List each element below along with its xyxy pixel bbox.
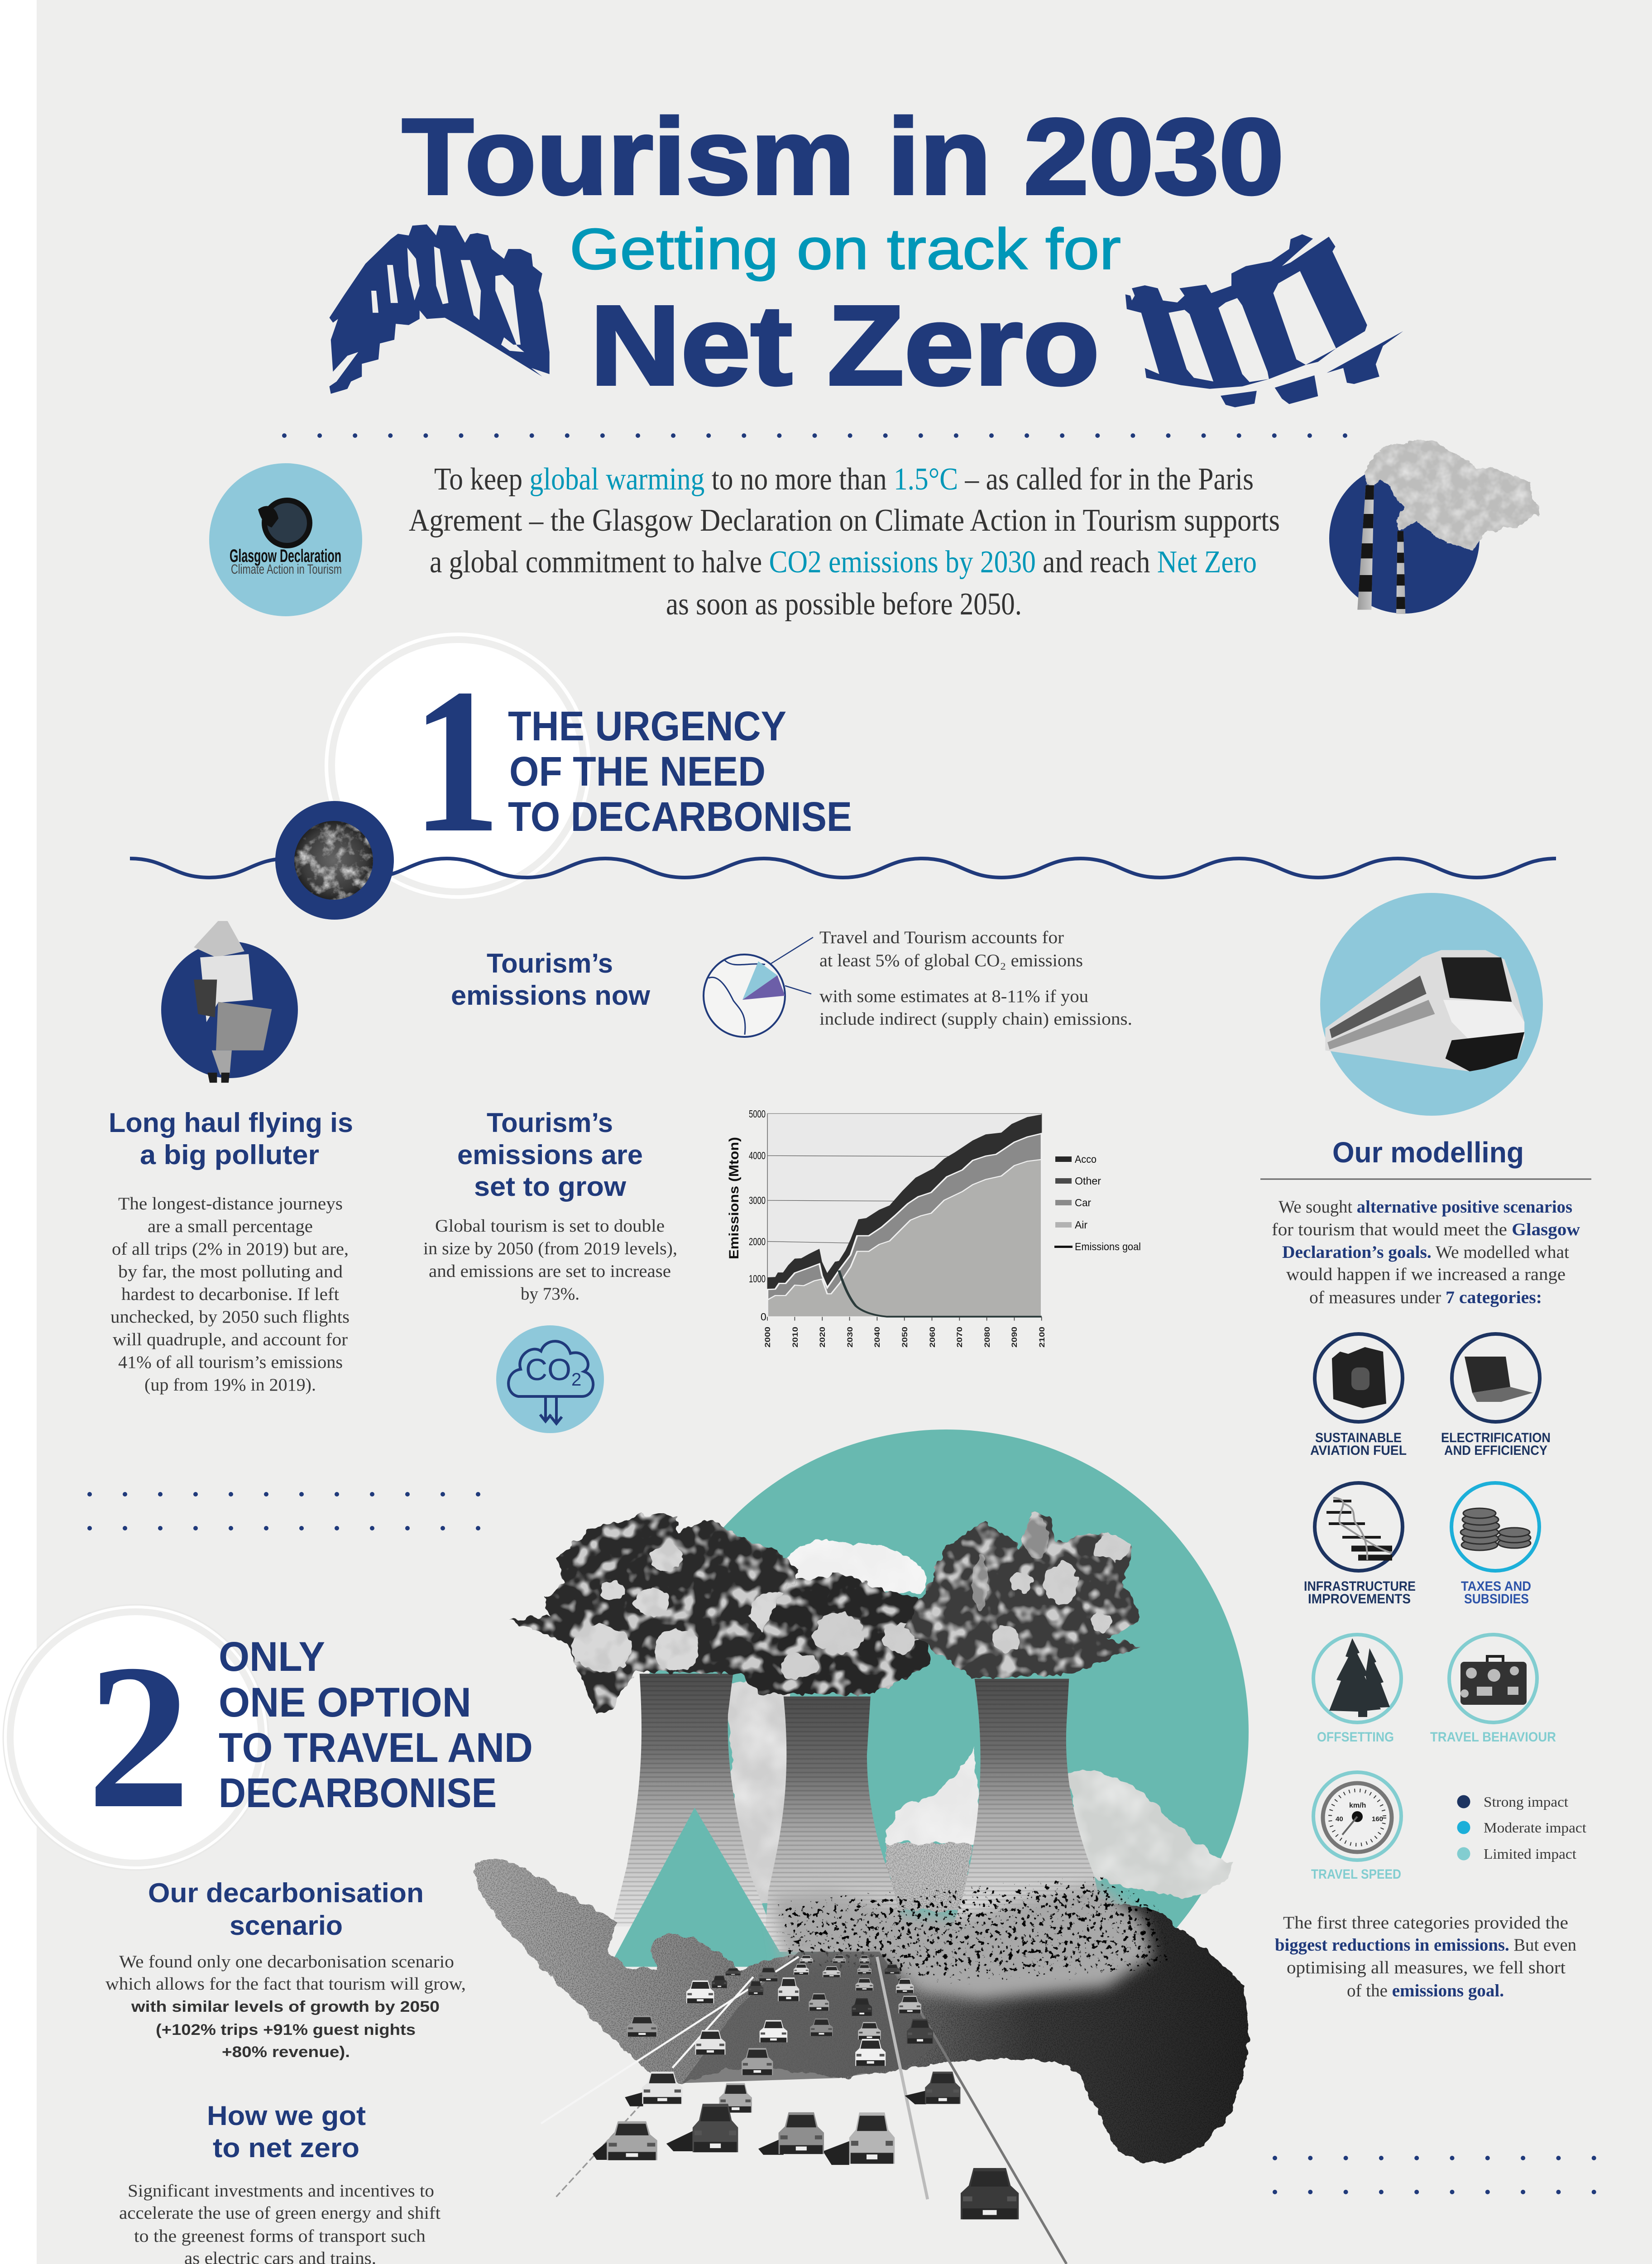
title: [402, 97, 1284, 408]
text: growth body: in size by 2050 (from 2019 levels),: [423, 1239, 677, 1258]
text: long haul body: unchecked, by 2050 such flights: [110, 1307, 350, 1327]
text: emissions share: Travel and Tourism accounts for: [819, 928, 1064, 947]
heading: our modelling: Our modelling: [1332, 1136, 1524, 1169]
icon: railway track left: [330, 225, 550, 394]
hand: [475, 1859, 1249, 2163]
intro text: as soon as possible before 2050.: [666, 587, 1022, 622]
text: long haul body: are a small percentage: [148, 1217, 313, 1236]
text: long haul body: (up from 19% in 2019).: [144, 1375, 316, 1395]
text: modelling conclusion: optimising all measures, we fell short: [1287, 1958, 1566, 1977]
text: decarbonisation body: with similar levels of growth by 2050: [131, 1998, 440, 2015]
heading: set to grow: emissions are: [457, 1140, 643, 1170]
chart y labels: 4000: [749, 1150, 766, 1161]
heading: set to grow: [457, 1108, 643, 1202]
chart y labels: 3000: [749, 1194, 766, 1206]
category: travel speed: 40: [1336, 1815, 1343, 1823]
text: net zero body: to the greenest forms of transport such: [134, 2226, 426, 2246]
heading: how we got to net zero: How we got: [207, 2101, 366, 2131]
legend: impact levels: Moderate impact: [1484, 1819, 1586, 1836]
legend: impact levels: Strong impact: [1484, 1794, 1568, 1810]
text: modelling intro: would happen if we increased a range: [1286, 1265, 1566, 1284]
chart x labels: 2080: [983, 1327, 991, 1348]
chart x labels: [763, 1327, 1046, 1348]
dots: right above section 3: [1275, 2158, 1596, 2192]
category: taxes and subsidies: SUBSIDIES: [1464, 1592, 1529, 1607]
chart x labels: 2030: [846, 1327, 854, 1348]
section 2 heading: [3, 1605, 533, 1870]
category: electrification and efficiency: ELECTRIFICATION: [1441, 1430, 1551, 1445]
text: growth body: and emissions are set to increase: [429, 1262, 671, 1281]
text: long haul body: hardest to decarbonise. If left: [121, 1285, 339, 1304]
heading: Long haul flying: a big polluter: [140, 1140, 319, 1170]
text: modelling intro: [1272, 1197, 1580, 1307]
cars: [593, 1955, 1019, 2219]
text: modelling conclusion: biggest reductions in emissions. But even: [1275, 1935, 1576, 1955]
chart y labels: 5000: [749, 1108, 766, 1120]
heading text: [219, 1634, 533, 1816]
dissolving speckles: [758, 1866, 1183, 1992]
category: travel speed: km/h: [1349, 1802, 1366, 1809]
heading text: OF THE NEED: [509, 748, 766, 795]
text: growth body: [423, 1216, 677, 1304]
text: long haul body: The longest-distance journeys: [118, 1194, 343, 1214]
divider under modelling heading: [1260, 1178, 1591, 1180]
icon: earth on navy circle: [275, 801, 394, 920]
icon: CO2 cloud: CO: [525, 1353, 571, 1387]
category: taxes and subsidies: TAXES AND: [1461, 1579, 1531, 1594]
legend: impact levels: [1457, 1794, 1586, 1862]
text: modelling intro: of measures under 7 categories:: [1309, 1288, 1542, 1307]
text: modelling conclusion: The first three categories provided the: [1283, 1913, 1568, 1933]
dotted divider: [284, 433, 1346, 438]
flowers: middle bouquet: [738, 1573, 930, 1694]
heading: our decarbonisation scenario: Our decarbonisation: [148, 1878, 424, 1908]
area: acco: [767, 1114, 1042, 1317]
category: travel speed: 160: [1372, 1815, 1383, 1823]
chart legend: [1054, 1153, 1141, 1252]
text: net zero body: accelerate the use of green energy and shift: [119, 2203, 441, 2223]
wave line: [130, 859, 1556, 878]
number 2: 2: [87, 1622, 191, 1851]
subtitle: Getting on track for: [570, 217, 1121, 282]
logo: Glasgow Declaration: [209, 463, 362, 616]
chart x labels: 2070: [955, 1327, 964, 1348]
category: travel speed: [1311, 1772, 1401, 1882]
text: decarbonisation body: [105, 1952, 466, 2061]
logo: Glasgow Declaration: Glasgow Declaration: [230, 546, 341, 566]
heading: emissions now: Tourism’s: [487, 948, 613, 979]
icon: globe with share wedge: [704, 937, 813, 1037]
chart y labels: [749, 1108, 766, 1323]
chart legend: Emissions goal: [1075, 1241, 1141, 1252]
heading text: ONLY: [219, 1634, 325, 1680]
number circle: [326, 634, 589, 897]
chart y labels: 1000: [749, 1273, 766, 1285]
heading text: THE URGENCY: [508, 703, 786, 749]
text: emissions share: include indirect (supply chain) emissions.: [819, 1009, 1132, 1029]
ground around tower bases: [773, 1884, 1152, 2000]
category: sustainable aviation fuel: [1310, 1334, 1407, 1458]
number 1: 1: [412, 646, 501, 876]
section 1 heading: [326, 634, 852, 897]
text: long haul body: by far, the most polluting and: [118, 1262, 343, 1281]
category: offsetting: OFFSETTING: [1317, 1730, 1394, 1745]
category: infrastructure improvements: IMPROVEMENTS: [1308, 1592, 1411, 1607]
category: sustainable aviation fuel: SUSTAINABLE: [1315, 1430, 1402, 1445]
sky between towers: [728, 1684, 789, 1901]
area: car: [767, 1133, 1042, 1317]
heading: Long haul flying: [109, 1108, 353, 1170]
text: modelling conclusion: of the emissions goal.: [1347, 1981, 1504, 2000]
heading: how we got to net zero: to net zero: [213, 2133, 359, 2163]
chart x labels: 2050: [900, 1327, 909, 1348]
intro text: Agrement – the Glasgow Declaration on Climate Action in Tourism supports: [409, 503, 1280, 538]
title line: Net Zero: Net Zero: [590, 282, 1100, 408]
text: growth body: Global tourism is set to double: [435, 1216, 665, 1236]
heading text: TO TRAVEL AND: [219, 1725, 533, 1771]
icon: railway track right: [1125, 234, 1403, 407]
category: offsetting: [1313, 1635, 1401, 1745]
chart x labels: 2010: [791, 1327, 800, 1348]
intro text: [409, 462, 1280, 622]
category: travel behaviour: TRAVEL BEHAVIOUR: [1430, 1730, 1556, 1745]
flowers: left bouquet: [511, 1515, 819, 1714]
heading: how we got to net zero: [207, 2101, 366, 2163]
road on hand: [683, 1952, 940, 2083]
category: electrification and efficiency: [1441, 1334, 1551, 1458]
chart x labels: 2090: [1010, 1327, 1019, 1348]
chart y labels: 2000: [749, 1236, 766, 1247]
chart x labels: 2020: [818, 1327, 827, 1348]
chart legend: Acco: [1075, 1153, 1097, 1165]
illustration: hand, towers, flowers and road: [475, 1429, 1249, 2264]
chart legend: Car: [1075, 1197, 1091, 1209]
text: decarbonisation body: (+102% trips +91% guest nights: [156, 2021, 416, 2039]
legend: impact levels: Limited impact: [1484, 1846, 1576, 1862]
intro text: a global commitment to halve CO2 emissions by 2030 and reach Net Zero: [430, 545, 1257, 580]
icon: CO2 cloud: [496, 1325, 604, 1433]
text: decarbonisation body: +80% revenue).: [222, 2043, 350, 2061]
chart y labels: 0: [761, 1311, 766, 1323]
heading: emissions now: [451, 948, 650, 1011]
heading text: [508, 703, 852, 840]
logo: Glasgow Declaration: Climate Action in Tourism: [231, 562, 342, 577]
towers: [612, 1674, 1104, 1952]
category: infrastructure improvements: INFRASTRUCTURE: [1304, 1579, 1416, 1594]
hill: [885, 1841, 973, 1911]
title line: Tourism in 2030: Tourism in 2030: [402, 97, 1284, 217]
heading: set to grow: set to grow: [474, 1171, 626, 1202]
category: electrification and efficiency: AND EFFICIENCY: [1444, 1443, 1547, 1458]
category: travel speed: TRAVEL SPEED: [1311, 1867, 1401, 1882]
heading: our decarbonisation scenario: scenario: [230, 1910, 343, 1941]
text: modelling intro: We sought alternative positive scenarios: [1279, 1197, 1572, 1217]
chart legend: Air: [1075, 1219, 1087, 1231]
heading text: DECARBONISE: [219, 1770, 497, 1816]
chart x labels: 2060: [928, 1327, 937, 1348]
icon: CO2 cloud: 2: [571, 1370, 581, 1390]
intro text: To keep global warming to no more than 1.5°C – as called for in the Paris: [434, 462, 1254, 497]
line: emissions goal: [839, 1271, 1042, 1317]
area: air: [767, 1160, 1042, 1317]
text: modelling intro: Declaration’s goals. We modelled what: [1282, 1242, 1569, 1262]
text: emissions share: at least 5% of global CO₂ emissions: [819, 951, 1083, 970]
lane lines: [541, 1957, 1067, 2264]
category: travel behaviour: [1430, 1635, 1556, 1745]
heading: our decarbonisation scenario: [148, 1878, 424, 1941]
text: long haul body: [110, 1194, 350, 1395]
chart x labels: 2100: [1038, 1327, 1046, 1348]
chart x labels: 2000: [763, 1327, 772, 1348]
chart x labels: 2040: [873, 1327, 881, 1348]
dots: left of section 2: [90, 1494, 480, 1528]
heading: Long haul flying: Long haul flying is: [109, 1108, 353, 1138]
text: emissions share: [819, 928, 1132, 1029]
icon: train: [1320, 893, 1543, 1116]
flowers: right bouquet: [905, 1512, 1142, 1679]
text: modelling conclusion: [1275, 1913, 1576, 2000]
category: infrastructure improvements: [1304, 1483, 1416, 1607]
text: net zero body: [119, 2181, 441, 2264]
teal triangle: [609, 1808, 789, 1967]
heading text: TO DECARBONISE: [508, 794, 852, 840]
chart: emissions area chart: [727, 1108, 1141, 1348]
heading: emissions now: emissions now: [451, 980, 650, 1011]
text: net zero body: Significant investments and incentives to: [128, 2181, 434, 2201]
chart axis title: Emissions (Mton): [727, 1137, 742, 1259]
text: decarbonisation body: We found only one decarbonisation scenario: [119, 1952, 454, 1971]
category: taxes and subsidies: [1451, 1483, 1539, 1607]
text: decarbonisation body: which allows for the fact that tourism will grow,: [105, 1974, 466, 1994]
clouds: [784, 1540, 1233, 1896]
icon: man with suitcases: [161, 921, 298, 1083]
category: sustainable aviation fuel: AVIATION FUEL: [1310, 1443, 1407, 1458]
text: long haul body: 41% of all tourism’s emissions: [118, 1353, 343, 1372]
icon: smoking chimneys: [1329, 440, 1539, 614]
text: emissions share: with some estimates at 8-11% if you: [819, 987, 1088, 1006]
chart legend: Other: [1075, 1175, 1101, 1187]
heading: set to grow: Tourism’s: [487, 1108, 613, 1138]
heading text: ONE OPTION: [219, 1679, 471, 1726]
text: growth body: by 73%.: [521, 1284, 579, 1304]
text: long haul body: of all trips (2% in 2019) but are,: [112, 1239, 349, 1259]
number circle: [3, 1605, 268, 1870]
text: long haul body: will quadruple, and account for: [113, 1330, 348, 1349]
text: modelling intro: for tourism that would meet the Glasgow: [1272, 1220, 1580, 1239]
